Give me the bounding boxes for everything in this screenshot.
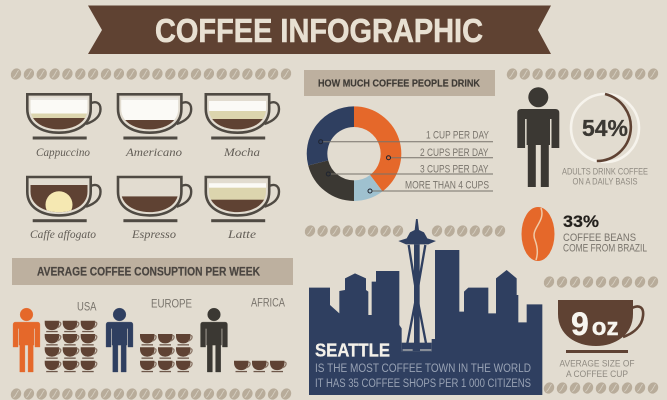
caption: average size: A COFFEE CUP <box>566 368 628 379</box>
cup: americano <box>117 94 191 140</box>
panel: 9oz cup size <box>558 300 643 379</box>
cup: espresso <box>117 177 191 222</box>
caption: adults drink coffee <box>562 166 648 186</box>
progress ring <box>571 94 639 162</box>
cup: caffe affogato <box>26 177 100 222</box>
label: caffe affogato: Caffe affogato <box>30 229 96 241</box>
cups: africa <box>234 361 286 372</box>
stat: 33%: 33% <box>563 212 599 231</box>
donut chart: cups per day <box>317 117 493 193</box>
legend markers <box>319 140 390 193</box>
skyline illustration <box>309 219 542 395</box>
cup: latte <box>204 177 279 222</box>
legend: 3 cups per day: 3 CUPS PER DAY <box>420 164 489 176</box>
legend lines <box>323 142 493 191</box>
bean divider: bottom left <box>9 386 293 400</box>
panel: 54% adults drink coffee <box>517 87 648 187</box>
caption: average size: AVERAGE SIZE OF <box>560 358 635 368</box>
caption: coffee beans: COFFEE BEANS <box>563 232 636 244</box>
text: seattle facts <box>315 361 531 390</box>
caption: average size <box>560 358 635 379</box>
segment: 1 cup per day <box>317 117 354 163</box>
panel: 33% beans from Brazil <box>522 207 647 261</box>
cups: usa <box>45 321 97 372</box>
cups: europe <box>140 334 192 372</box>
bean divider: right lower <box>542 380 660 396</box>
stat: 54%: 54% <box>582 115 628 141</box>
bean divider: right upper <box>542 274 660 290</box>
panel: seattle skyline <box>309 219 542 395</box>
heading: how much coffee people drink: HOW MUCH COFFEE PEOPLE DRINK <box>318 78 480 90</box>
icon: coffee cup <box>558 300 643 353</box>
heading: how much coffee people drink <box>304 70 495 96</box>
label: espresso: Espresso <box>131 229 176 241</box>
icon: dark person <box>201 308 227 372</box>
cup: cappuccino <box>26 94 100 140</box>
text: seattle facts: IT HAS 35 COFFEE SHOPS PER 1 000 CITIZENS <box>315 376 531 390</box>
label: mocha: Mocha <box>223 147 260 159</box>
cup: mocha <box>204 94 279 140</box>
text: seattle facts: IS THE MOST COFFEE TOWN IN THE WORLD <box>315 361 531 375</box>
label: cappuccino: Cappuccino <box>36 147 90 159</box>
heading: seattle: SEATTLE <box>315 340 390 360</box>
icon: navy person <box>106 308 133 372</box>
segment: 2 cups per day <box>354 117 391 183</box>
caption: coffee beans <box>563 232 647 254</box>
label: latte: Latte <box>227 229 256 241</box>
panel: coffee types <box>26 94 279 241</box>
title banner: COFFEE INFOGRAPHIC <box>155 12 483 49</box>
panel: consumption by region <box>13 296 286 372</box>
legend: more than 4 cups: MORE THAN 4 CUPS <box>405 180 489 192</box>
icon: orange person <box>13 308 40 372</box>
label: usa: USA <box>77 300 96 314</box>
caption: adults drink coffee: ON A DAILY BASIS <box>572 176 638 186</box>
bean divider: top right <box>505 66 660 82</box>
icon: coffee bean <box>522 207 554 261</box>
icon: person <box>517 87 559 187</box>
title banner <box>88 6 551 54</box>
label: americano: Americano <box>125 147 182 159</box>
heading: average coffee consumption: AVERAGE COFFEE CONSUPTION PER WEEK <box>37 264 260 278</box>
bean divider: top left <box>9 66 293 82</box>
label: europe: EUROPE <box>151 296 192 310</box>
heading: average coffee consumption <box>12 258 293 285</box>
segment: 3 cups per day <box>318 163 354 191</box>
legend: 1 cup per day: 1 CUP PER DAY <box>426 130 489 142</box>
bean divider: middle <box>303 223 507 239</box>
label: africa: AFRICA <box>251 296 285 310</box>
legend: 2 cups per day: 2 CUPS PER DAY <box>420 147 489 159</box>
segment: more than 4 cups <box>354 183 376 191</box>
stat: 9oz: 9oz <box>571 306 618 342</box>
